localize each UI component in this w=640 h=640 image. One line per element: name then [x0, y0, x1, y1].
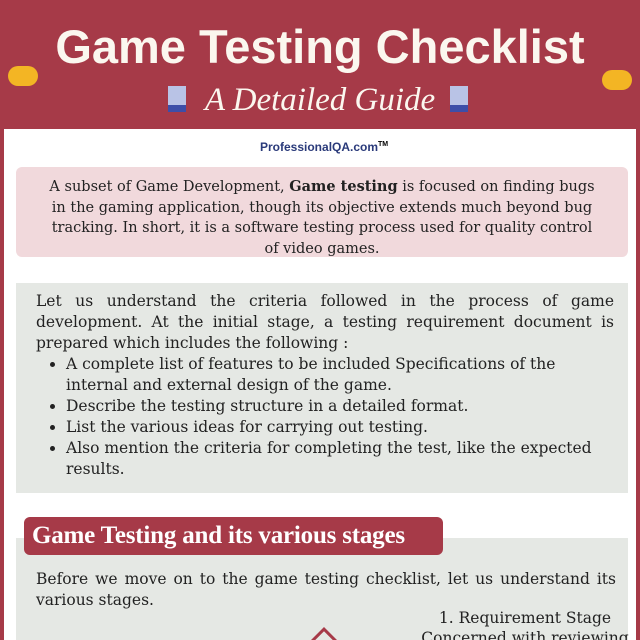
bullet list: Also mention the criteria for completing the test, like the expected results. — [66, 439, 592, 478]
criteria intro: Let us understand the criteria followed in the process of game development. At the initial stage, a testing requirement document is prepared which includes the following : — [36, 292, 614, 352]
stage 1 — [421, 609, 629, 640]
section heading: Game Testing and its various stages — [32, 522, 405, 549]
stages intro text: Before we move on to the game testing checklist, let us understand its various stages. — [36, 570, 616, 609]
panel: criteria — [16, 283, 628, 493]
title: Game Testing Checklist — [55, 20, 585, 73]
bullet list: A complete list of features to be included Specifications of the internal and external design of the game. — [66, 355, 555, 394]
logo: ProfessionalQA.comTM — [260, 140, 388, 154]
header banner — [0, 0, 640, 129]
intro text: in the gaming application, though its objective extends much beyond bug — [52, 200, 592, 216]
intro text: of video games. — [264, 240, 380, 256]
icon: gamepad left — [8, 66, 38, 86]
icon: document left — [168, 86, 186, 112]
icon: diamond — [307, 627, 341, 640]
icon: document right — [450, 86, 468, 112]
bullet list — [50, 355, 592, 478]
panel: stages — [16, 538, 628, 640]
subtitle: A Detailed Guide — [205, 82, 435, 118]
section heading — [24, 517, 443, 555]
icon: gamepad right — [602, 70, 632, 90]
intro text: tracking. In short, it is a software testing process used for quality control — [52, 220, 592, 236]
bullet list: List the various ideas for carrying out testing. — [66, 418, 428, 436]
stage 1: 1. Requirement Stage — [439, 609, 611, 627]
bullet list: Describe the testing structure in a detailed format. — [66, 397, 468, 415]
intro panel — [16, 167, 628, 257]
intro text: A subset of Game Development, Game testing is focused on finding bugs — [49, 178, 595, 195]
intro text — [49, 178, 595, 256]
